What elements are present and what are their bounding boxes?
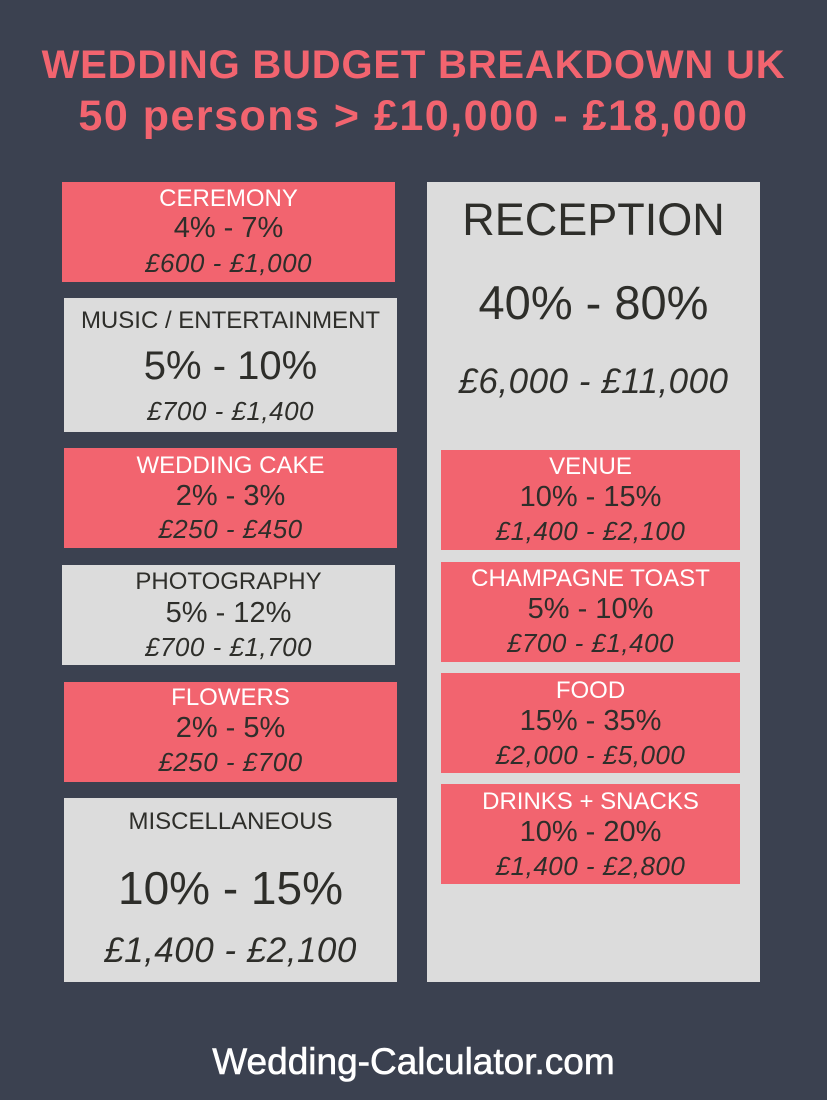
sub-panel: food: £2,000 - £5,000: [496, 740, 685, 770]
panel: music: £700 - £1,400: [147, 396, 314, 426]
sub-panel: drinks: 10% - 20%: [520, 816, 661, 848]
panel: photography: 5% - 12%: [166, 597, 291, 629]
reception percent: 40% - 80%: [479, 276, 708, 329]
panel: music: 5% - 10%: [144, 344, 317, 388]
panel: reception: [427, 182, 760, 982]
sub-panel: champagne toast: £700 - £1,400: [507, 628, 674, 658]
sub-panel: drinks: DRINKS + SNACKS: [482, 788, 699, 815]
panel: flowers: [64, 682, 397, 782]
panel: wedding cake: [64, 448, 397, 548]
panel: music: [64, 298, 397, 432]
footer: Wedding-Calculator.com: [212, 1041, 615, 1082]
panel: ceremony: [62, 182, 395, 282]
panel: photography: £700 - £1,700: [145, 632, 312, 662]
sub-panel: champagne toast: CHAMPAGNE TOAST: [471, 565, 710, 592]
panel: flowers: £250 - £700: [158, 747, 303, 777]
panel: flowers: FLOWERS: [171, 684, 290, 711]
panel: ceremony: CEREMONY: [159, 185, 298, 212]
panel: wedding cake: £250 - £450: [158, 514, 303, 544]
panel: photography: [62, 565, 395, 665]
sub-panel: food: FOOD: [556, 677, 625, 704]
panel: photography: PHOTOGRAPHY: [135, 568, 322, 595]
panel: ceremony: 4% - 7%: [174, 212, 283, 244]
sub-panel: venue: VENUE: [549, 453, 632, 480]
panel: miscellaneous: [64, 798, 397, 982]
panel: flowers: 2% - 5%: [176, 712, 285, 744]
reception amount: £6,000 - £11,000: [458, 362, 729, 401]
panel: miscellaneous: £1,400 - £2,100: [104, 931, 357, 970]
sub-panel: venue: £1,400 - £2,100: [496, 516, 685, 546]
sub-panel: champagne toast: 5% - 10%: [528, 593, 653, 625]
panel: ceremony: £600 - £1,000: [145, 248, 312, 278]
panel: miscellaneous: 10% - 15%: [118, 862, 343, 914]
panel: wedding cake: WEDDING CAKE: [136, 452, 324, 479]
panel: miscellaneous: MISCELLANEOUS: [128, 808, 333, 835]
sub-panel: venue: [441, 450, 740, 550]
subtitle: 50 persons > £10,000 - £18,000: [78, 92, 749, 140]
sub-panel: food: 15% - 35%: [520, 705, 661, 737]
panel: music: MUSIC / ENTERTAINMENT: [81, 307, 380, 334]
title: WEDDING BUDGET BREAKDOWN UK: [42, 43, 785, 87]
sub-panel: drinks: [441, 784, 740, 884]
sub-panel: drinks: £1,400 - £2,800: [496, 851, 685, 881]
panel: wedding cake: 2% - 3%: [176, 480, 285, 512]
sub-panel: food: [441, 673, 740, 773]
reception heading: RECEPTION: [462, 194, 725, 245]
sub-panel: venue: 10% - 15%: [520, 481, 661, 513]
sub-panel: champagne toast: [441, 562, 740, 662]
